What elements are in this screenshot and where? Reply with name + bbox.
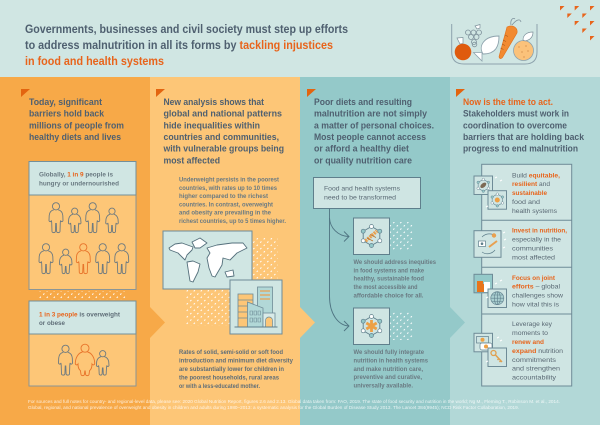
action: build systems: resilient and — [512, 181, 550, 188]
panel: barriers — [21, 89, 136, 386]
icon: bowl of fruit and vegetables — [452, 18, 537, 64]
dotted patches — [390, 222, 413, 340]
text block: integrate nutrition — [354, 349, 428, 390]
text block: integrate nutrition: preventive and curative, — [354, 374, 422, 381]
panel heading — [29, 97, 124, 142]
footnote: Global, regional, and national prevalence of overweight and obesity in children and adults during 1980–2013: a systematic analysis for the Global Burden of Disease Study 2013. The Lancet 384(9945); NCD Risk Factor Collaboration, 2019. — [28, 405, 519, 410]
text block: address inequities: affordable choice for all. — [354, 292, 424, 300]
action: leverage key moments: Leverage key — [512, 321, 553, 328]
action: build systems: Build equitable, — [512, 172, 560, 179]
panel heading — [463, 97, 585, 154]
text block: underweight and overweight: countries, with rates up to 10 times — [179, 185, 277, 192]
icon: money and key — [474, 333, 506, 366]
marker triangle — [156, 89, 165, 97]
text block: underweight and overweight: higher compared to the richest — [179, 193, 269, 200]
footnote — [28, 399, 560, 410]
panel heading — [163, 97, 284, 165]
text block: address inequities: in food systems and make — [354, 268, 424, 274]
header background — [0, 0, 600, 77]
actions table — [482, 164, 572, 386]
panel heading: progress to end malnutrition — [463, 144, 578, 154]
text block: food introduction: are substantially lower for children in — [179, 366, 284, 373]
marker triangle — [21, 89, 30, 97]
icon: food system hexagon — [354, 218, 390, 254]
panel: time to act — [28, 89, 585, 410]
decorative orange triangles — [560, 6, 594, 40]
text block: address inequities: healthy, sustainable food — [354, 276, 424, 283]
panel heading: healthy diets and lives — [29, 132, 121, 142]
text block: underweight and overweight: richest countries, up to 5 times higher. — [179, 218, 286, 225]
panel heading: or afford a healthy diet — [314, 144, 409, 154]
column background: analysis — [150, 77, 300, 425]
action: focus joint efforts: efforts – global — [512, 284, 561, 291]
text block: food introduction: or with a less-educated mother. — [179, 383, 260, 390]
text block: integrate nutrition: nutrition in health systems — [354, 358, 428, 364]
icon: health system hexagon — [354, 308, 390, 344]
callout: 1 in 9 hungry: hungry or undernourished — [39, 180, 119, 188]
action: build systems: sustainable — [512, 190, 547, 197]
icon: city buildings — [230, 280, 282, 334]
panel heading: global and national patterns — [164, 109, 282, 119]
arrow: barriers to analysis — [150, 307, 165, 338]
title: Governments, businesses and civil society must step up efforts — [25, 22, 348, 36]
panel heading: New analysis shows that — [164, 97, 264, 107]
action: leverage key moments: moments to — [512, 330, 548, 337]
text block: address inequities — [354, 259, 436, 300]
action: focus joint efforts: how vital this is — [512, 302, 560, 308]
callout: 1 in 3 overweight — [29, 301, 136, 386]
icon: equitable systems — [474, 176, 506, 209]
text block: underweight and overweight: countries. In contrast, overweight — [179, 202, 274, 208]
arrow: poor diets to time to act — [450, 307, 465, 338]
icon: world map — [163, 231, 252, 289]
action: focus joint efforts: challenges show — [512, 292, 563, 300]
action: invest in nutrition: Invest in nutrition, — [512, 228, 567, 235]
action: leverage key moments — [512, 321, 563, 382]
panel heading: Now is the time to act. — [463, 97, 553, 107]
panel heading: coordination to overcome — [463, 120, 567, 130]
people row: one in nine — [39, 203, 129, 274]
column background: barriers — [0, 77, 150, 425]
panel heading: malnutrition are not simply — [314, 109, 428, 119]
marker triangle — [307, 89, 316, 97]
action: invest in nutrition: communities — [512, 246, 554, 252]
text block: food introduction — [179, 349, 293, 390]
callout: 1 in 3 overweight: 1 in 3 people is overweight — [39, 312, 121, 318]
panel heading: Today, significant — [29, 97, 102, 107]
title: to address malnutrition in all its forms by tackling injustices — [25, 38, 333, 52]
action: build systems — [512, 172, 560, 215]
panel heading: Stakeholders must work in — [463, 109, 569, 119]
text block: address inequities: We should address inequities — [354, 259, 436, 266]
action: leverage key moments: expand nutrition — [512, 348, 563, 355]
callout: systems need transforming: need to be transformed — [324, 195, 396, 202]
title — [25, 22, 348, 68]
panel heading: most affected — [164, 155, 220, 165]
text block: integrate nutrition: and make nutrition care, — [354, 366, 423, 373]
callout: systems need transforming — [314, 178, 420, 208]
action: leverage key moments: and strengthen — [512, 366, 560, 373]
callout: 1 in 9 hungry — [29, 162, 136, 290]
panel heading: or quality nutrition care — [314, 155, 412, 165]
text block: underweight and overweight: Underweight persists in the poorest — [179, 176, 280, 184]
panel heading: countries and communities, — [164, 132, 279, 142]
text block: food introduction: introduction and minimum diet diversity — [179, 358, 293, 364]
action: leverage key moments: renew and — [512, 339, 544, 346]
text block: underweight and overweight: and obesity are prevailing in the — [179, 210, 271, 216]
panel heading: a matter of personal choices. — [314, 120, 434, 130]
icon: investment — [474, 231, 506, 257]
action: focus joint efforts: Focus on joint — [512, 275, 556, 282]
column background: time to act — [450, 77, 600, 425]
action: build systems: food and — [512, 199, 540, 206]
callout: 1 in 9 hungry: Globally, 1 in 9 people is — [39, 172, 113, 178]
action: leverage key moments: commitments — [512, 357, 557, 364]
people row: one in three — [58, 344, 109, 376]
panel heading: barriers that are holding back — [463, 132, 585, 142]
action: invest in nutrition — [512, 228, 567, 261]
action: invest in nutrition: especially in the — [512, 236, 561, 244]
text block: integrate nutrition: universally available. — [354, 382, 413, 390]
arrow: analysis to poor diets — [300, 307, 315, 338]
action: invest in nutrition: most affected — [512, 254, 555, 261]
panel heading: barriers hold back — [29, 109, 105, 119]
footnote: For sources and full notes for country- and regional-level data, please see: 2020 Global Nutrition Report, figures 2.6 and 2.13. Global data taken from: FAO, 2019. The state of food security and nutrition in the world; Ng M., Fleming T., Robinson M. et al., 2014. — [28, 399, 560, 404]
action: build systems: health systems — [512, 208, 558, 215]
dotted band — [38, 291, 126, 300]
connector arrows — [330, 208, 349, 331]
column background: poor diets — [300, 77, 450, 425]
panel: analysis — [156, 89, 293, 390]
text block: underweight and overweight — [179, 176, 286, 225]
panel heading — [314, 97, 434, 165]
panel heading: Poor diets and resulting — [314, 97, 412, 107]
marker triangle — [456, 89, 465, 97]
callout: systems need transforming: Food and health systems — [324, 186, 401, 193]
panel heading: with vulnerable groups being — [163, 144, 284, 154]
action: leverage key moments: accountability — [512, 374, 557, 382]
dotted patches — [185, 238, 278, 326]
icon: joint efforts and globe — [474, 274, 506, 308]
panel heading: Most people cannot access — [314, 132, 426, 142]
panel heading: hide inequalities within — [164, 120, 260, 130]
callout: 1 in 3 overweight: or obese — [39, 320, 65, 327]
text block: integrate nutrition: We should fully integrate — [354, 349, 424, 356]
action: focus joint efforts — [512, 275, 563, 308]
text block: food introduction: the poorest households, rural areas — [179, 374, 279, 382]
panel heading: millions of people from — [29, 120, 124, 130]
text block: address inequities: the most accessible and — [354, 284, 418, 291]
panel: poor diets — [307, 89, 436, 390]
text block: food introduction: Rates of solid, semi-solid or soft food — [179, 349, 283, 356]
title: in food and health systems — [25, 54, 164, 68]
